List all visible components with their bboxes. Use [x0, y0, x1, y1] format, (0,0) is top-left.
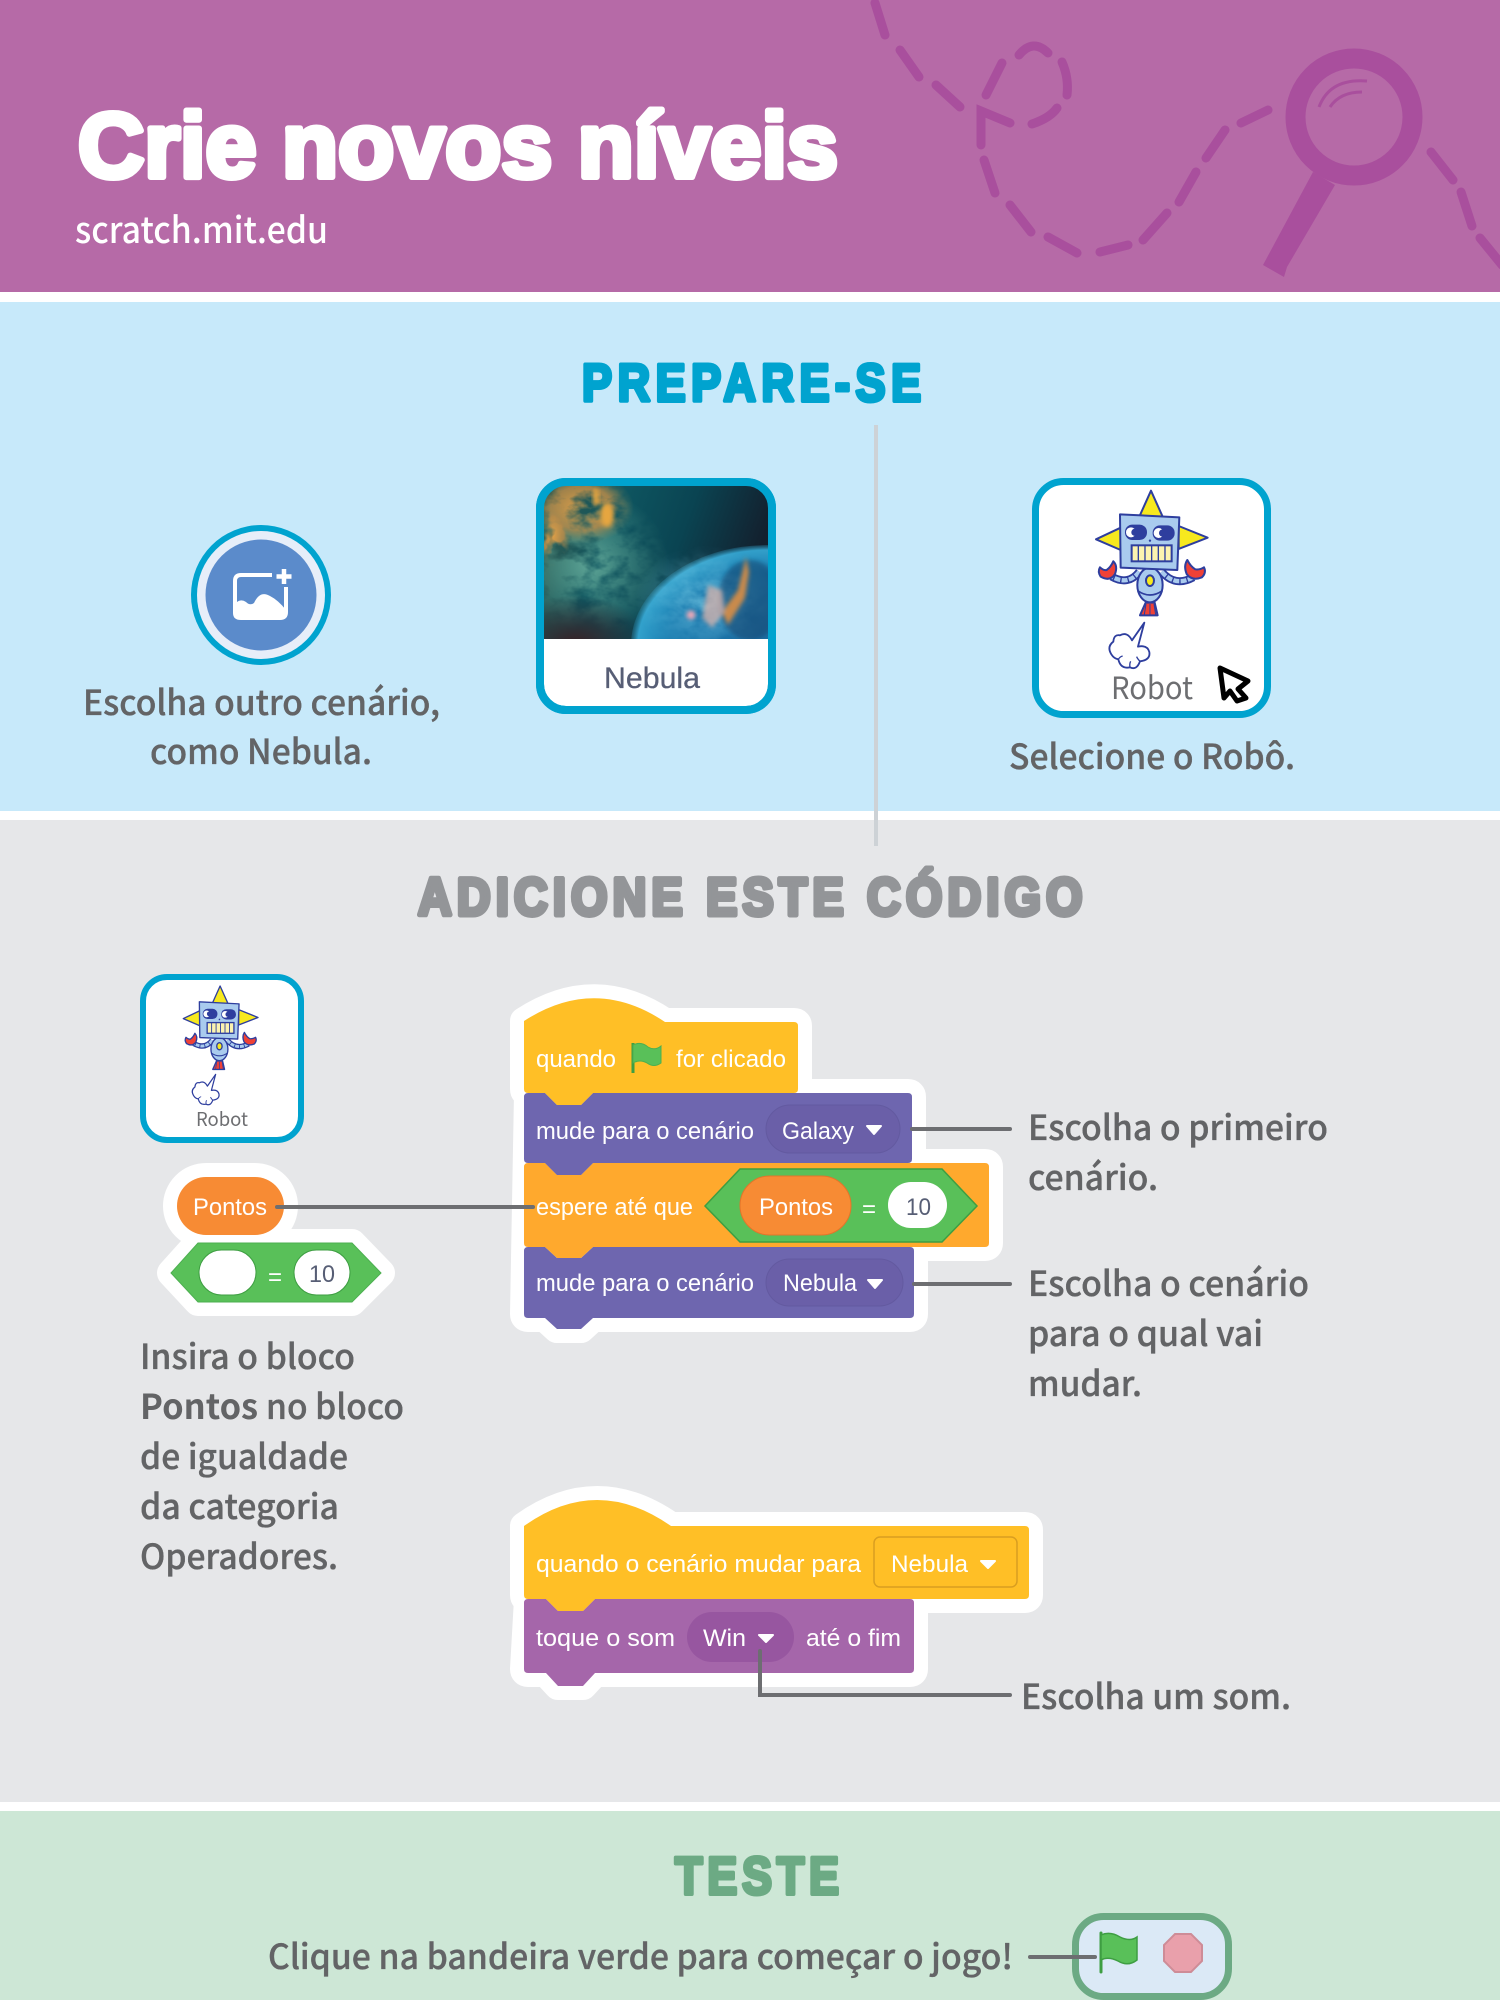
block: pontos: Pontos [193, 1194, 267, 1221]
label: robot: Robot [1111, 663, 1193, 708]
panel: code background [0, 820, 1500, 1802]
connector: pontos to wait block [277, 1205, 533, 1209]
text: select robot: Selecione o Robô. [1009, 729, 1295, 779]
block: wait until: espere até que [536, 1194, 693, 1221]
text: choose sound: Escolha um som. [1021, 1669, 1291, 1719]
block: wait until: 10 [906, 1194, 931, 1221]
text: choose first backdrop: cenário. [1028, 1150, 1158, 1200]
panel: prepare background [0, 302, 1500, 811]
text: choose target backdrop: mudar. [1028, 1356, 1142, 1406]
text: choose target backdrop: Escolha o cenário [1028, 1256, 1309, 1306]
connector: sound [760, 1651, 1010, 1695]
icon: robot small [183, 986, 258, 1105]
icon: robot [1096, 491, 1208, 668]
block: when backdrop switches: Nebula [891, 1551, 969, 1578]
script: backdrop code [524, 998, 989, 1329]
text: choose target backdrop [1028, 1256, 1309, 1406]
text: insert block: de igualdade [140, 1429, 348, 1479]
block: switch backdrop nebula: mude para o cenário [536, 1270, 754, 1297]
block: wait until: = [862, 1196, 876, 1223]
block: play sound: até o fim [806, 1625, 901, 1652]
text: choose target backdrop: para o qual vai [1028, 1306, 1263, 1356]
blocks: pontos and equals [171, 1177, 381, 1302]
text: insert block: Operadores. [140, 1529, 338, 1579]
block: when flag clicked [524, 998, 798, 1105]
text: click green flag: Clique na bandeira verde para começar o jogo! [268, 1929, 1013, 1979]
text: insert block: da categoria [140, 1479, 339, 1529]
block: play sound: Win [703, 1625, 746, 1652]
block: wait until [524, 1163, 989, 1257]
block: switch backdrop galaxy: mude para o cenário [536, 1118, 754, 1145]
text: insert block: Pontos [140, 1379, 258, 1429]
icon: dashed trail [875, 3, 1500, 265]
block: play sound [524, 1599, 914, 1686]
icon: choose backdrop button [191, 525, 331, 665]
block: play sound: toque o som [536, 1625, 675, 1652]
card: robot sprite small [143, 977, 301, 1140]
panel: test background [0, 1811, 1500, 2000]
block: when flag clicked: for clicado [676, 1046, 786, 1073]
text: insert block: no bloco [266, 1379, 404, 1429]
block: equals: = [268, 1264, 282, 1291]
icon: green flag [633, 1043, 661, 1073]
text: insert block [140, 1329, 404, 1579]
text: choose backdrop: como Nebula. [150, 724, 372, 774]
card: robot sprite large [1036, 482, 1268, 714]
panel: header [0, 0, 1500, 292]
block: equals [171, 1243, 381, 1302]
block: when flag clicked: quando [536, 1046, 616, 1073]
block: when backdrop switches: quando o cenário mudar para [536, 1551, 862, 1578]
title: Crie novos níveis [78, 95, 838, 197]
label: robot small: Robot [196, 1105, 248, 1132]
icon: magnifying glass [1263, 58, 1412, 277]
heading: test: TESTE [675, 1847, 839, 1906]
label: nebula: Nebula [604, 662, 700, 695]
icon: stop sign [1164, 1934, 1202, 1972]
block: equals: 10 [309, 1261, 335, 1288]
icon: green flag [1101, 1933, 1137, 1972]
connector: first backdrop [912, 1127, 1010, 1131]
block: pontos [177, 1177, 284, 1235]
text: choose backdrop: Escolha outro cenário, [83, 675, 440, 725]
block: switch backdrop galaxy [524, 1093, 912, 1175]
text: choose backdrop [83, 675, 440, 774]
connector: second backdrop [914, 1282, 1010, 1286]
text: choose first backdrop: Escolha o primeiro [1028, 1100, 1328, 1150]
icon: cursor [1220, 668, 1248, 701]
card: flag and stop controls [1076, 1916, 1228, 1996]
heading: add code: ADICIONE ESTE CÓDIGO [418, 867, 1082, 927]
block: wait until: Pontos [759, 1194, 833, 1221]
text: insert block: Insira o bloco [140, 1329, 355, 1379]
divider [874, 425, 878, 846]
block: switch backdrop galaxy: Galaxy [782, 1118, 854, 1145]
card: nebula backdrop [536, 478, 776, 714]
block: when backdrop switches [524, 1500, 1029, 1611]
connector: flag [1030, 1955, 1095, 1959]
text: choose first backdrop [1028, 1100, 1328, 1200]
block: switch backdrop nebula [524, 1247, 914, 1329]
subtitle: url: scratch.mit.edu [75, 202, 328, 254]
image: nebula [544, 486, 768, 639]
heading: prepare-se: PREPARE-SE [582, 354, 921, 413]
block: switch backdrop nebula: Nebula [783, 1270, 858, 1297]
script: sound code [524, 1500, 1029, 1686]
